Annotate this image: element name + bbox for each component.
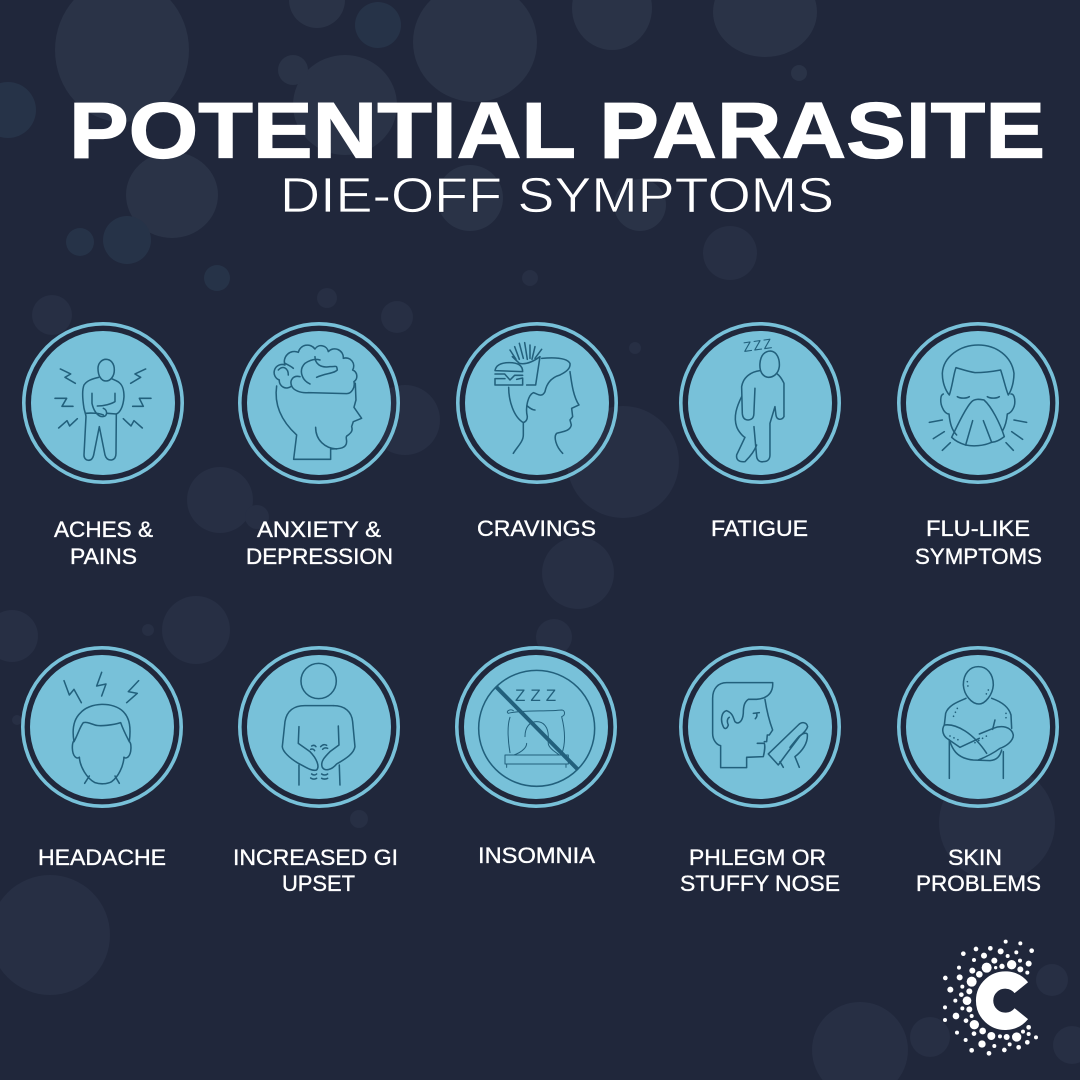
label: aches and pains: PAINS (70, 544, 137, 569)
icon: head with burger and fries (495, 343, 579, 453)
label: cravings: CRAVINGS (477, 516, 596, 541)
label: flu-like symptoms: FLU-LIKE (926, 516, 1030, 541)
badge: aches and pains (24, 324, 182, 482)
title: POTENTIAL PARASITE (69, 86, 1045, 174)
icon: zzz: ZZZ (515, 686, 561, 705)
icon: crossed arms figure (943, 667, 1013, 778)
badge: insomnia (457, 648, 615, 806)
label: aches and pains: ACHES & (54, 517, 153, 542)
label: increased gi upset: INCREASED GI (233, 845, 398, 870)
label: skin problems: PROBLEMS (916, 871, 1041, 896)
label: anxiety and depression (246, 517, 393, 569)
badge: increased gi upset (240, 648, 398, 806)
icon: profile with tissue (713, 683, 808, 768)
label: phlegm or stuffy nose: STUFFY NOSE (680, 871, 840, 896)
icon: aching body (55, 359, 151, 460)
subtitle: DIE-OFF SYMPTOMS (280, 169, 834, 223)
badge: flu-like symptoms (899, 324, 1057, 482)
label: aches and pains (54, 517, 153, 569)
label: skin problems (916, 845, 1041, 896)
icon: face with tissue (929, 345, 1027, 450)
icon: head with brain (274, 345, 362, 459)
label: anxiety and depression: DEPRESSION (246, 544, 393, 569)
logo (943, 940, 1038, 1056)
label: phlegm or stuffy nose: PHLEGM OR (689, 845, 826, 870)
icon: zzz: ZZZ (742, 335, 774, 355)
icon: no sleep (479, 670, 595, 786)
label: skin problems: SKIN (948, 845, 1002, 870)
label: increased gi upset: UPSET (282, 871, 355, 896)
badge: skin problems (899, 648, 1057, 806)
icon: slumped figure (735, 351, 784, 462)
label: anxiety and depression: ANXIETY & (257, 517, 381, 542)
badge: anxiety and depression (240, 324, 398, 482)
label: fatigue: FATIGUE (711, 516, 808, 541)
label: phlegm or stuffy nose (680, 845, 840, 896)
label: increased gi upset (233, 845, 398, 896)
badge: fatigue (681, 324, 839, 482)
label: insomnia: INSOMNIA (478, 843, 595, 868)
label: flu-like symptoms: SYMPTOMS (915, 544, 1042, 569)
icon: head with lightning (64, 672, 139, 784)
badge: cravings (458, 324, 616, 482)
badge: headache (23, 648, 181, 806)
label: headache: HEADACHE (38, 845, 166, 870)
label: flu-like symptoms (915, 516, 1042, 569)
icon: person holding stomach (282, 663, 355, 785)
badge: phlegm or stuffy nose (681, 648, 839, 806)
